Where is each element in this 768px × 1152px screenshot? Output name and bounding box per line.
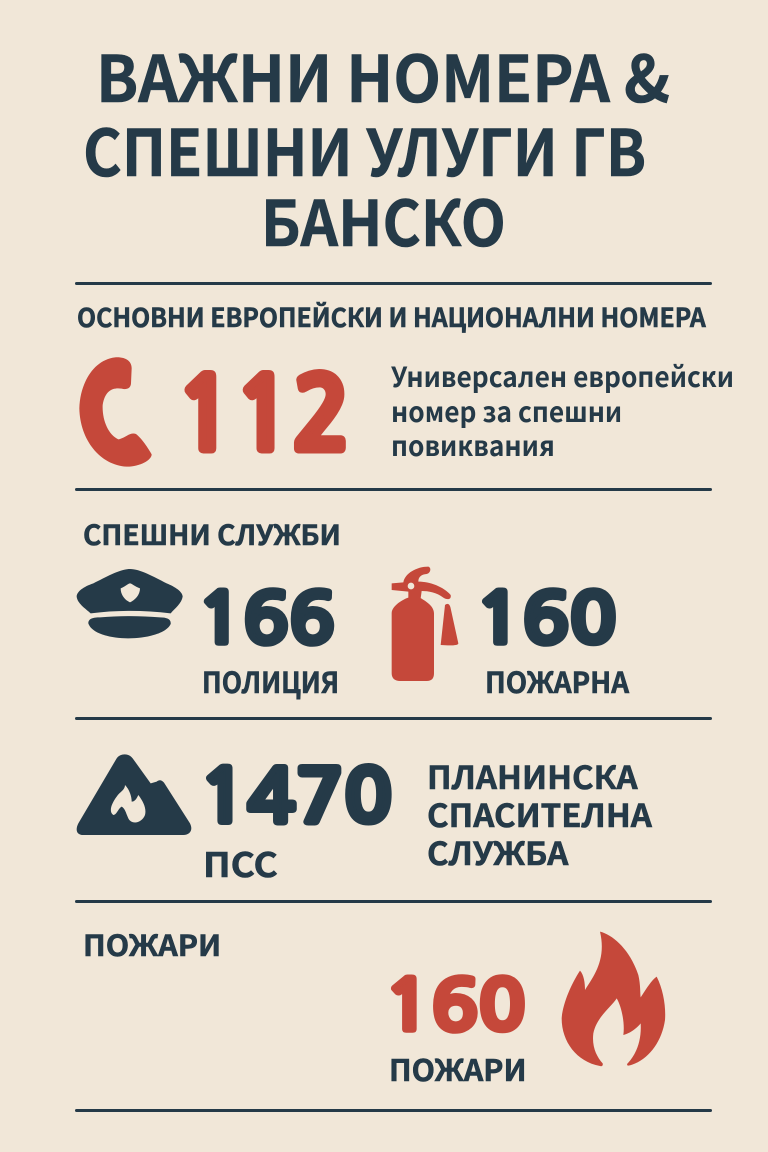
title: СПЕШНИ УЛУГИ ГВ	[83, 103, 646, 195]
text: 112 description: повиквания	[391, 425, 555, 465]
label: police: ПОЛИЦИЯ	[202, 660, 339, 702]
icon: flame	[562, 932, 666, 1066]
label: PSS: ПСС	[203, 838, 278, 887]
heading: fires: ПОЖАРИ	[83, 923, 221, 965]
title	[83, 29, 670, 265]
number: 1470: 1470	[199, 761, 392, 833]
number: 166: 166	[197, 586, 335, 654]
icon: police cap	[76, 569, 183, 638]
label: fires: ПОЖАРИ	[389, 1046, 527, 1090]
text: mountain rescue	[427, 753, 652, 875]
text: 112 description	[391, 356, 734, 465]
number: 160 fire brigade: 160	[475, 586, 617, 654]
heading: emergency services: СПЕШНИ СЛУЖБИ	[83, 513, 341, 553]
text: mountain rescue: СЛУЖБА	[427, 829, 568, 875]
title: ВАЖНИ НОМЕРА &	[96, 29, 670, 121]
icon: mountain	[76, 754, 192, 835]
text: mountain rescue: СПАСИТЕЛНА	[427, 791, 652, 837]
number: 160 fires: 160	[384, 973, 526, 1041]
heading: main numbers: ОСНОВНИ ЕВРОПЕЙСКИ И НАЦИОНАЛНИ НОМЕРА	[77, 298, 706, 335]
text: mountain rescue: ПЛАНИНСКА	[427, 753, 638, 799]
text: 112 description: Универсален европейски	[391, 356, 734, 396]
title: БАНСКО	[261, 174, 506, 265]
icon: fire extinguisher	[392, 566, 458, 681]
label: fire brigade: ПОЖАРНА	[485, 660, 629, 702]
text: 112 description: номер за спешни	[391, 390, 622, 430]
icon: phone	[79, 357, 152, 467]
number: 112: 112	[176, 366, 351, 464]
